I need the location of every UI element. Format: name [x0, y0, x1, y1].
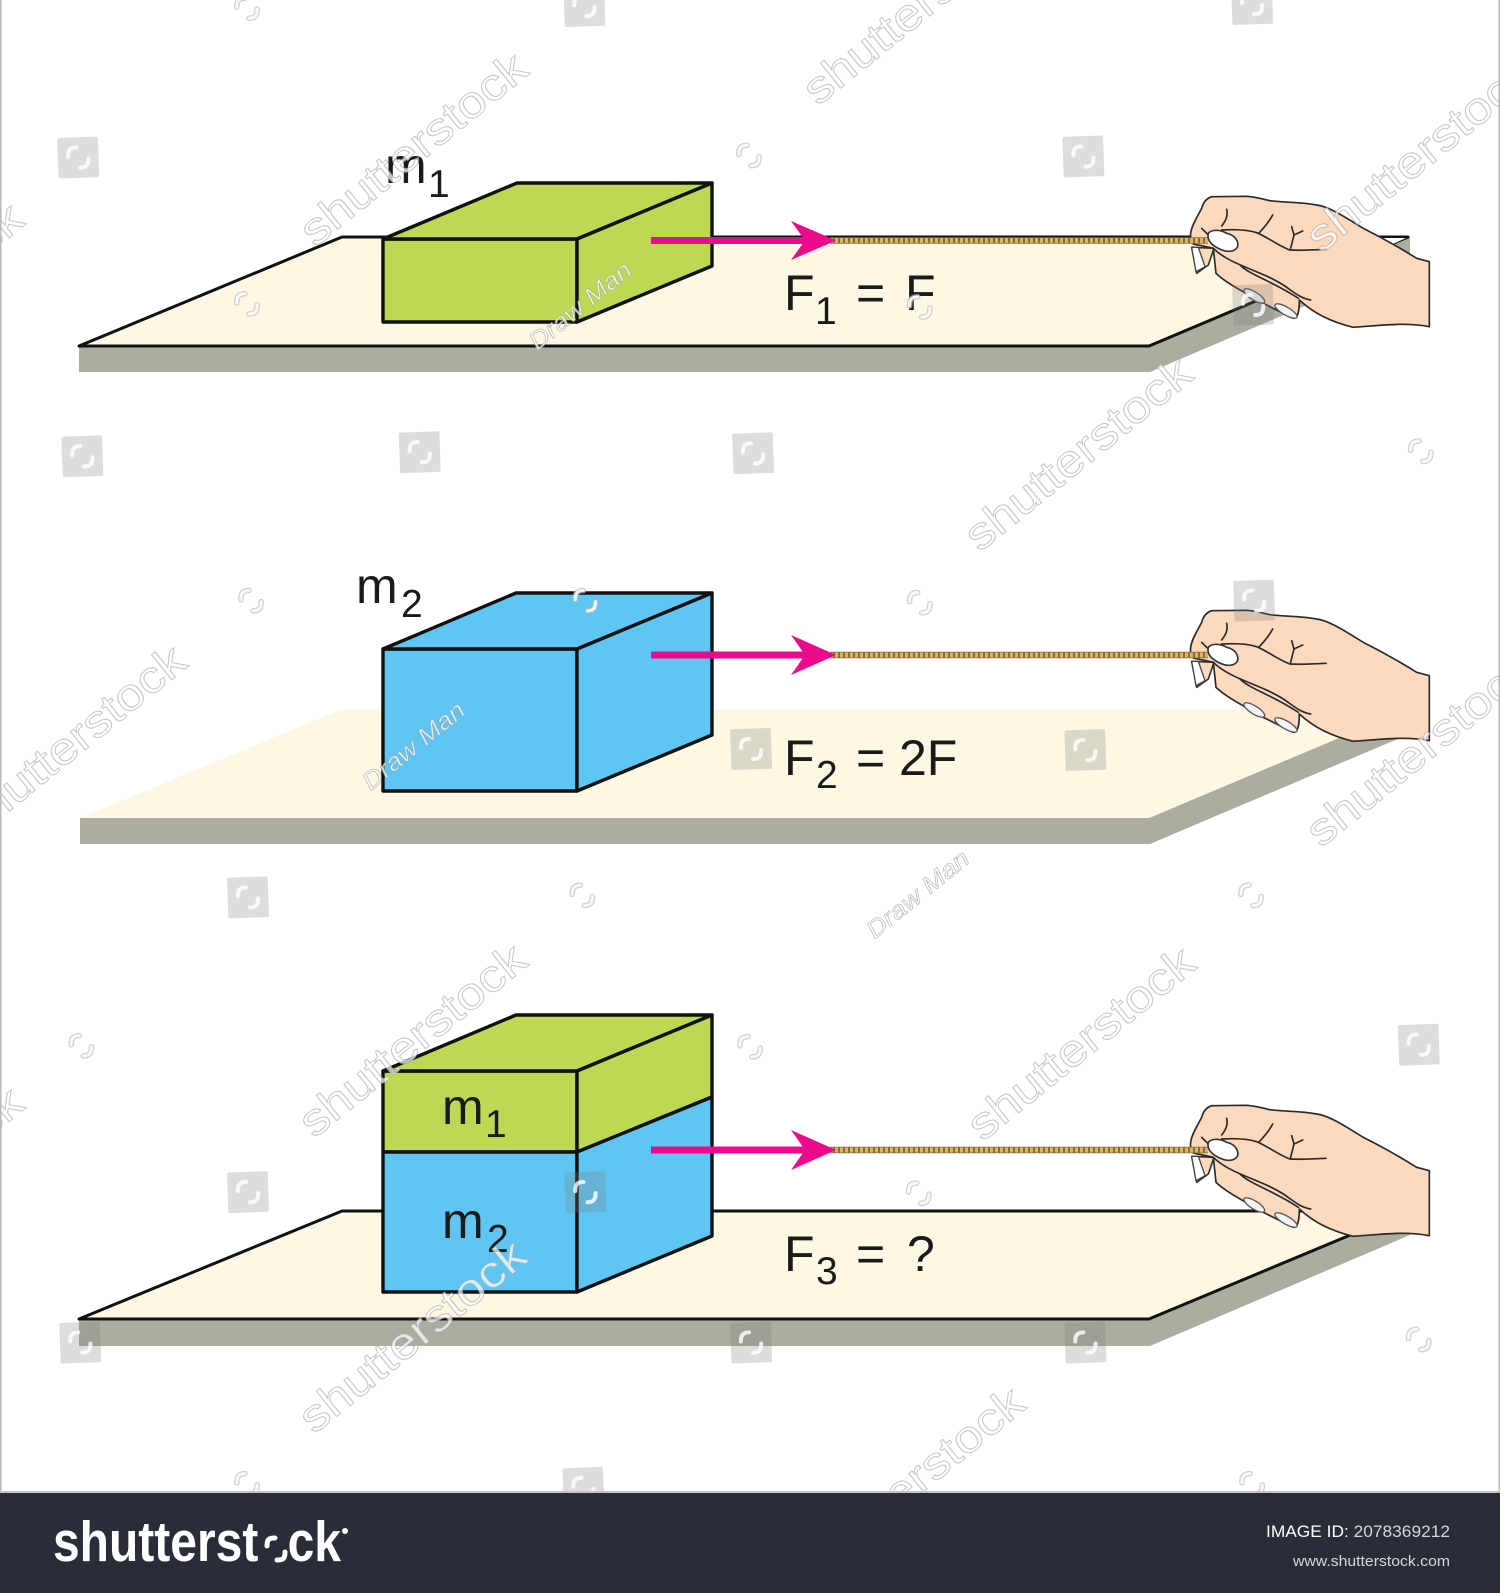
label m2: m	[356, 558, 398, 614]
equation F3 = ?: F	[784, 1226, 815, 1282]
stock watermarks: shutterstock	[955, 347, 1202, 561]
stock watermarks: Draw Man	[861, 845, 975, 944]
rope 3	[830, 1147, 1208, 1153]
scene 1: green block m1 pulled with force F	[79, 138, 1429, 372]
platform 1 surface	[79, 237, 1408, 346]
rope 2	[830, 652, 1208, 658]
stock watermarks: shutterstock	[787, 1377, 1034, 1590]
label m2 on block: m	[442, 1193, 484, 1249]
force arrow 3	[651, 1130, 836, 1170]
image id: IMAGE ID: 2078369212	[1266, 1522, 1450, 1541]
hand 1	[1190, 196, 1429, 327]
equation F3 = ?: =	[856, 1226, 885, 1282]
stock watermarks: shutterstock	[958, 937, 1205, 1150]
equation F2 = 2F: =	[856, 730, 885, 786]
equation F2 = 2F: 2F	[899, 730, 957, 786]
equation F3 = ?: ?	[907, 1226, 935, 1282]
equation F1 = F: F	[905, 265, 936, 321]
label m2: 2	[401, 583, 423, 626]
platform 2 surface	[80, 709, 1408, 818]
label m1 on block: 1	[485, 1103, 507, 1146]
equation F3 = ?: 3	[816, 1250, 838, 1293]
thumbnail 1	[1208, 230, 1238, 251]
stacked blocks	[383, 1015, 712, 1292]
equation F1 = F: F	[784, 265, 815, 321]
stock watermarks: shutterstock	[290, 42, 537, 256]
platform 3 surface	[79, 1211, 1408, 1319]
label m1 on block: m	[442, 1079, 484, 1135]
equation F1 = F: 1	[815, 290, 837, 333]
website: www.shutterstock.com	[1292, 1553, 1450, 1570]
stock watermarks: shutterstock	[289, 934, 536, 1147]
rope 1	[830, 237, 1208, 244]
stock watermarks: shutterstock	[289, 1230, 536, 1443]
platform 2 side shadow	[80, 709, 1407, 844]
block m2	[383, 593, 712, 791]
equation F2 = 2F: F	[784, 730, 815, 786]
equation F1 = F: =	[856, 265, 885, 321]
platform 1 side shadow	[79, 237, 1410, 372]
equation F2 = 2F: 2	[816, 754, 838, 797]
shutterstock logo: shutterstock	[53, 1510, 341, 1574]
hand 3	[1190, 1105, 1429, 1236]
force arrow 1	[651, 221, 836, 260]
force arrow 2	[651, 635, 836, 675]
stock watermarks: Draw Man	[524, 257, 637, 356]
platform 1 corner gap	[1382, 238, 1406, 244]
footer bar	[0, 1493, 1500, 1593]
thumbnail 3	[1208, 1139, 1238, 1160]
scene 3: stacked blocks m1 and m2 pulled with unknown force	[79, 1015, 1429, 1346]
platform 3 side shadow	[79, 1210, 1410, 1346]
label m1: m	[385, 138, 427, 194]
label m2 on block: 2	[487, 1218, 509, 1261]
stock watermarks: Draw Man	[357, 697, 471, 796]
thumbnail 2	[1208, 644, 1238, 665]
hand 2	[1190, 610, 1429, 741]
label m1: 1	[428, 163, 450, 206]
block m1	[383, 183, 712, 322]
scene 2: blue block m2 pulled with force 2F	[80, 558, 1429, 844]
